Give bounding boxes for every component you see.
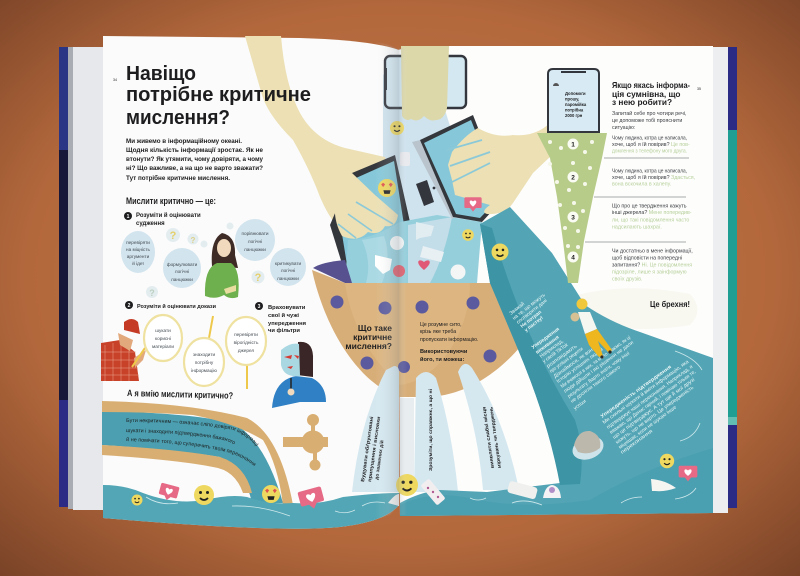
text: confirmation bias: міцнішає, коли не шукаю інше	[618, 404, 678, 451]
bubble: formulate chains	[163, 248, 201, 288]
point 2 label: 2	[128, 303, 131, 309]
valve	[283, 414, 328, 470]
question 3: ли, що такі повідомлення часто	[612, 218, 689, 224]
question marks	[146, 222, 264, 298]
river main	[400, 207, 713, 516]
river inner dark band	[480, 224, 582, 485]
subheading: can I think critically: А я вмію мислити критично?	[127, 388, 233, 401]
sieve holes	[330, 296, 496, 373]
point 2 label	[125, 301, 216, 310]
phone with message: паромійка	[565, 102, 587, 107]
pipe with water	[102, 401, 328, 504]
question 1	[612, 136, 690, 154]
step numbers: 4	[571, 254, 575, 262]
page number 35: 35	[697, 87, 701, 91]
text: confirmation bias: підтверджує наші переконання. Наприклад, я	[606, 364, 694, 431]
step numbers: 3	[571, 214, 575, 222]
right page	[398, 46, 713, 516]
question 2: вона вскочила в халепу.	[612, 182, 671, 188]
funnel with questions	[537, 69, 607, 283]
callout: mind the traps: на те, що можуть	[512, 292, 547, 322]
callout: mind the traps: Не потрап	[520, 309, 543, 330]
lower water patch	[400, 448, 713, 516]
bubble: compare chains: логічні	[248, 239, 262, 244]
point 2 label: Розуміти й оцінювати докази	[137, 303, 216, 310]
text: survivorship bias: про успішні рецепти	[549, 346, 585, 375]
left hand fingers	[335, 173, 398, 239]
heading: what is critical thinking: критичне	[353, 332, 392, 342]
intro paragraph: Щодня кількість інформації зростає. Як не	[126, 146, 263, 154]
stream 1: до зважених дій	[373, 440, 386, 480]
text: survivorship bias: не досягли такого самого	[570, 364, 622, 405]
top phone	[384, 56, 466, 108]
text: survivorship bias: Упередження	[531, 326, 561, 351]
text: survivorship bias: Ми вчимося в них, та мало знаємо, як ці	[560, 335, 632, 390]
text: survivorship bias: люди дійшли і які рішення не дали	[562, 339, 635, 395]
bubble: check arguments: перевіряти	[126, 240, 150, 245]
person on river	[570, 298, 612, 359]
right heading: Якщо якась інформа-	[612, 80, 690, 90]
bowl interior	[313, 260, 352, 283]
point 3 label	[255, 302, 306, 334]
magnifier: check sources	[226, 317, 266, 389]
stream 2	[414, 372, 458, 492]
water inside pipe	[102, 411, 283, 503]
question 2	[612, 168, 695, 188]
sieve explanation: крізь яке треба	[420, 329, 456, 335]
point 1 label: 1	[127, 214, 130, 220]
question 4: Чи достатньо в мене інформації,	[612, 248, 693, 254]
callout: mind the traps: Зважай	[508, 300, 526, 317]
point 1 label: Розуміти й оцінювати	[136, 212, 201, 219]
thinking woman	[205, 233, 239, 298]
point 3 label: упередження	[268, 321, 306, 327]
bubble: formulate chains: ланцюжки	[171, 277, 193, 282]
bubble: critique chains: критикувати	[275, 261, 301, 266]
magnifier: find materials: шукати	[155, 328, 171, 333]
tablet flow blue	[345, 215, 482, 283]
floating icons in water	[396, 474, 561, 505]
magnifier: find information: потрібну	[195, 360, 214, 365]
magnifier: check sources: вірогідність	[234, 340, 259, 345]
heading: what is critical thinking: Що таке	[358, 323, 392, 333]
bubble: check arguments: на міцність	[126, 247, 151, 252]
intro text: це допоможе тобі прояснити	[612, 118, 682, 124]
magnifier: find materials	[144, 315, 182, 361]
bubble: compare chains: порівнювати	[241, 231, 269, 236]
question marks: ?	[255, 272, 262, 284]
magnifier: check sources: перевіряти	[234, 332, 258, 337]
stream 3: виявляти слабкі місця	[480, 406, 496, 469]
text: survivorship bias: успіхи	[573, 398, 588, 412]
text: survivorship bias	[531, 326, 635, 412]
question 2: хоче, щоб я їй повірив? Здається,	[612, 174, 695, 181]
phone with message: 2000 грн	[565, 113, 583, 118]
question 1: Чому людина, котра це написала,	[612, 136, 687, 142]
point 3 label: свої й чужі	[268, 312, 299, 319]
stream 3: міркувань чи тверджень	[488, 406, 503, 469]
text: survivorship bias: результату. Варто знати, чому інші	[567, 351, 631, 400]
bubble: compare chains: ланцюжки	[244, 247, 266, 252]
right tablet	[420, 115, 505, 222]
inner pipe	[102, 445, 252, 493]
intro paragraph: ні? Що важливе, а на що не варто зважати?	[126, 164, 263, 172]
question 3: Що про це твердження кажуть	[612, 204, 687, 210]
book cover and page stacks	[59, 47, 737, 513]
stream 1: припущення і висновки	[367, 416, 382, 482]
pale blob behind conclusion	[560, 288, 698, 329]
question 1: домлення з телефону мого друга.	[612, 148, 687, 154]
text: confirmation bias: Ми схильні шукати й вміти інформацію, яка	[601, 358, 690, 426]
point 3 label: 3	[258, 304, 261, 310]
text: confirmation bias	[600, 358, 697, 456]
stream 3	[458, 364, 519, 490]
question 4: підозріле, лише я заінформую	[612, 270, 687, 276]
step numbers: 2	[571, 174, 575, 182]
water ripples	[470, 351, 702, 505]
text: survivorship bias: Наприклад,	[539, 338, 565, 360]
pipe caption	[126, 418, 260, 466]
camera square	[416, 180, 434, 206]
outer pipe	[102, 401, 293, 505]
point 3 label: чи фільтри	[268, 327, 300, 334]
point 1: judgments	[121, 212, 306, 298]
bubble: critique chains: логічні	[281, 268, 295, 273]
magnifier: find information: знаходити	[193, 352, 216, 357]
point 2: evidence	[101, 301, 266, 389]
sieve explanation: Це розумне сито,	[420, 322, 462, 328]
bubble: compare chains	[235, 219, 275, 261]
intro text: Запитай себе про чотири речі,	[612, 110, 686, 117]
text: confirmation bias: вважаю, що Денис гарний, і помічаю тільки те,	[608, 368, 697, 436]
callout: mind the traps: спотворити дані	[516, 298, 549, 326]
worker with magnifier	[101, 319, 146, 381]
text: confirmation bias: кажуть, що не варто. Це упередженість	[615, 385, 695, 446]
magnifier: find materials: матеріали	[152, 344, 174, 349]
right tablet back	[412, 140, 458, 219]
sieve explanation: Використовуючи	[420, 349, 468, 355]
intro text: ситуацію:	[612, 125, 635, 131]
bubble: check arguments: й ідеї	[132, 260, 144, 266]
conclusion: Це брехня!	[650, 300, 690, 309]
question 4: своїх друзів.	[612, 276, 642, 282]
pipe caption: й не помічати того, що суперечить твоїм переконанням	[126, 437, 256, 466]
text: confirmation bias: переконання	[620, 428, 654, 456]
illustration: information flow and hands	[245, 36, 552, 283]
heading: what is critical thinking: мислення?	[345, 341, 392, 351]
stream 2: Зрозуміти, що справжнє, а що ні	[428, 389, 434, 471]
left page title: потрібне критичне	[126, 83, 311, 106]
bubble: formulate chains: логічні	[175, 269, 189, 274]
funnel dots	[548, 140, 594, 249]
stream 1	[352, 366, 399, 492]
left bottom water	[103, 485, 399, 529]
question 1: хоче, щоб я їй повірив? Це пов-	[612, 141, 690, 148]
bubble: check arguments: аргументи	[127, 254, 150, 259]
question 4: щоб відповісти на попередні	[612, 256, 682, 262]
bubble: critique chains: ланцюжки	[277, 276, 299, 281]
pale information stream	[345, 60, 480, 283]
rock in water	[569, 431, 607, 464]
question 4	[612, 248, 693, 282]
question 2: Чому людина, котра це написала,	[612, 168, 687, 174]
sieve explanation: його, ти можеш:	[420, 356, 464, 363]
phone with message	[548, 69, 599, 132]
question 3: інші джерела? Мене попередив-	[612, 210, 692, 216]
teal river from sleeve	[396, 207, 713, 516]
text: survivorship bias: Дізнаймося, як вони	[552, 344, 597, 380]
streams from sieve	[352, 364, 519, 494]
reaction on sleeve	[492, 244, 508, 260]
question 3	[612, 204, 692, 230]
subheading: Мислити критично — це:	[126, 196, 216, 206]
funnel body	[537, 133, 607, 283]
left page title: мислення?	[126, 106, 230, 129]
woman with mask	[272, 342, 326, 408]
point 1 label	[124, 212, 201, 227]
point 1 label: судження	[136, 221, 165, 227]
sieve explanation	[420, 322, 478, 363]
text: survivorship bias: розповідають	[546, 343, 579, 370]
bubble: check arguments	[121, 231, 155, 273]
intro paragraph: Тут потрібне критичне мислення.	[126, 174, 230, 182]
text: survivorship bias: виживання	[535, 335, 561, 356]
sieve explanation: пропускати інформацію.	[420, 337, 478, 343]
left arm	[245, 36, 400, 240]
stream 1: Будувати обґрунтовані	[359, 416, 375, 482]
top hand	[401, 46, 449, 120]
right hand	[448, 123, 552, 214]
right heading: з нею робити?	[612, 97, 672, 107]
text: confirmation bias: що це підтверджує. А тут ще й мої друзі	[611, 376, 696, 441]
question marks: ?	[170, 230, 177, 242]
bowl body	[312, 270, 520, 397]
water ripples left	[146, 497, 385, 516]
bubble: critique chains	[270, 248, 306, 286]
bowl highlight	[345, 283, 470, 385]
page number 34: 34	[113, 78, 117, 82]
callout: mind the traps: у пастку!	[524, 315, 545, 334]
left floating reactions	[132, 483, 399, 512]
text: confirmation bias: Упередженість підтвердження	[600, 364, 673, 420]
magnifier: check sources: джерел	[238, 348, 254, 353]
question 4: запитання? Ні. Це повідомлення	[612, 262, 692, 268]
gutter shading	[375, 42, 407, 520]
flow bubbles and reactions	[375, 121, 482, 280]
phone with message: потрібна	[565, 108, 584, 112]
question marks: ?	[191, 236, 196, 245]
intro paragraph: втонути? Як утямити, чому довіряти, а чому	[126, 155, 263, 163]
phone with message: прошу,	[565, 96, 579, 102]
step numbers: 1	[571, 142, 575, 148]
pipe caption: шукати і знаходити підтвердження бажаного	[126, 428, 235, 444]
question 3: надсилають шахраї.	[612, 224, 662, 230]
pipe caption: Бути некритичним — означає сліпо довіряти інформації,	[126, 418, 260, 446]
callout: mind the traps	[508, 292, 549, 334]
magnifier: find information: інформацію	[191, 368, 217, 373]
bubble: formulate chains: формулювати	[167, 262, 198, 267]
magnifier: find information	[184, 316, 224, 386]
point 3: biases	[255, 302, 326, 408]
text: survivorship bias: Історію успішних людей	[555, 346, 605, 385]
step numbers	[568, 138, 578, 262]
sieve bowl	[312, 260, 520, 397]
left tablet	[330, 155, 410, 283]
intro paragraph: Ми живемо в інформаційному океані.	[126, 137, 242, 145]
point 3 label: Враховувати	[268, 305, 306, 311]
left page	[103, 36, 399, 529]
text: survivorship bias: у своїй TikTok	[541, 341, 570, 365]
question marks: ?	[149, 288, 155, 298]
magnifier: find materials: корисні	[155, 336, 171, 341]
right heading: ція сумнівна, що	[612, 89, 680, 99]
left page title: Навіщо	[126, 62, 196, 85]
emoji, heart, boat bubble	[651, 454, 697, 491]
phone with message: Допомоги	[565, 91, 586, 96]
